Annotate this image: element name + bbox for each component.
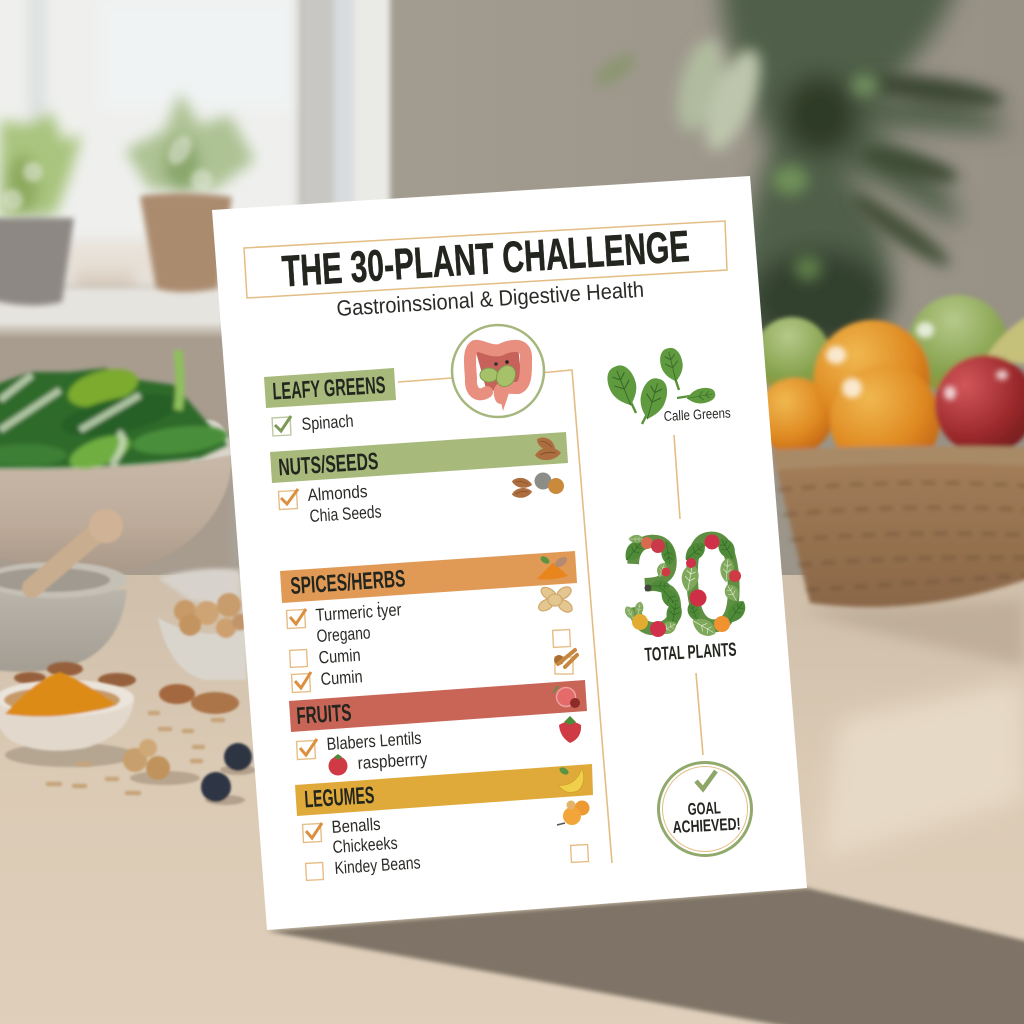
icon: almonds on banner <box>534 434 562 461</box>
icon: banana <box>558 766 584 793</box>
connector lines <box>398 370 703 863</box>
panel: legumes: Chickeeks <box>332 833 398 857</box>
background: window frame <box>302 0 390 290</box>
panel: spices and herbs <box>280 551 577 692</box>
icon: spinach leaves <box>603 346 716 424</box>
background: plant pots <box>0 193 232 306</box>
background: potted plants foliage <box>0 92 255 218</box>
checkbox: oregano <box>553 630 570 647</box>
background: window <box>0 0 305 290</box>
background: wooden table <box>0 575 1024 1024</box>
background: turmeric bowl <box>0 672 135 767</box>
panel: leafy greens: LEAFY GREENS <box>272 372 386 405</box>
icon: cinnamon <box>554 650 577 674</box>
checkbox: turmeric <box>287 609 306 628</box>
background: almonds behind bowl <box>14 662 239 714</box>
background: nut bowl <box>158 593 248 680</box>
background: wall <box>0 0 1024 620</box>
badge: goal achieved: GOAL <box>687 798 721 819</box>
panel: leafy greens <box>264 368 396 436</box>
icon: oranges <box>557 800 590 825</box>
badge: goal achieved <box>658 762 752 856</box>
background: spinach bowl <box>0 420 232 572</box>
badge: goal achieved: ACHIEVED! <box>672 814 741 837</box>
panel: spices and herbs: SPICES/HERBS <box>290 565 406 600</box>
background: large house plant <box>720 0 1010 350</box>
icon: nuts and seeds <box>511 472 564 499</box>
panel: fruits: raspberrry <box>357 748 428 773</box>
background: fruit basket <box>754 295 1024 607</box>
panel: fruits: Blabers Lentils <box>326 728 422 754</box>
panel: legumes: LEGUMES <box>304 782 375 813</box>
checkbox: almonds <box>279 489 298 509</box>
basket highlights on fruit <box>826 322 1008 400</box>
background: plant leaf highlights <box>1 131 213 211</box>
panel: nuts and seeds: Almonds <box>307 481 368 505</box>
panel: legumes <box>295 764 593 880</box>
graphic: number 30 made of leaves and fruit: 30 <box>621 504 746 664</box>
panel: legumes: Kindey Beans <box>334 852 421 878</box>
background: spinach leaves <box>0 350 229 475</box>
icon: digestive system in circle <box>452 325 544 417</box>
icon: pomegranate <box>553 686 580 708</box>
poster cast shadow <box>267 888 1024 1024</box>
icon: strawberry <box>559 716 581 743</box>
checkbox: kidney beans <box>306 863 323 880</box>
checkbox: cumin empty <box>290 650 307 667</box>
background: window sill <box>0 288 230 590</box>
background: white plate <box>158 569 240 610</box>
subtitle: Gastroinssional & Digestive Health <box>336 277 645 321</box>
checkbox: right legumes <box>571 845 588 862</box>
panel: fruits: FRUITS <box>296 699 352 730</box>
checkbox: beans <box>303 823 322 842</box>
title frame and heading <box>244 221 727 298</box>
checkbox: spinach <box>272 416 291 436</box>
label: total plants: TOTAL PLANTS <box>644 640 737 666</box>
background: walnut, seeds and blueberries <box>48 713 256 805</box>
panel: spices and herbs: Turmeric ṫyer <box>315 599 402 625</box>
icon: ginger <box>537 584 574 615</box>
icon: turmeric pile <box>537 555 569 580</box>
icon: raspberry <box>328 754 348 776</box>
background: mortar and pestle <box>0 509 127 672</box>
panel: spices and herbs: Cumin <box>320 666 363 689</box>
checkbox: cumin checked <box>292 672 311 692</box>
panel: spices and herbs: Oregano <box>316 622 371 646</box>
panel: nuts and seeds: NUTS/SEEDS <box>278 448 379 481</box>
panel: leafy greens: Spinach <box>301 411 354 434</box>
background: pale plant leaves <box>591 33 879 281</box>
label: greens: Calle Greens <box>663 405 731 424</box>
checkbox: lentils <box>297 739 317 759</box>
title frame and heading: THE 30-PLANT CHALLENGE <box>281 222 691 296</box>
panel: legumes: Benalls <box>331 814 381 837</box>
background: dark plant leaves <box>845 67 1006 273</box>
poster sheet <box>212 176 807 930</box>
panel: fruits <box>289 680 587 776</box>
panel: spices and herbs: Cumin <box>318 645 361 667</box>
panel: nuts and seeds: Chia Seeds <box>309 501 382 526</box>
panel: nuts and seeds <box>270 432 568 526</box>
